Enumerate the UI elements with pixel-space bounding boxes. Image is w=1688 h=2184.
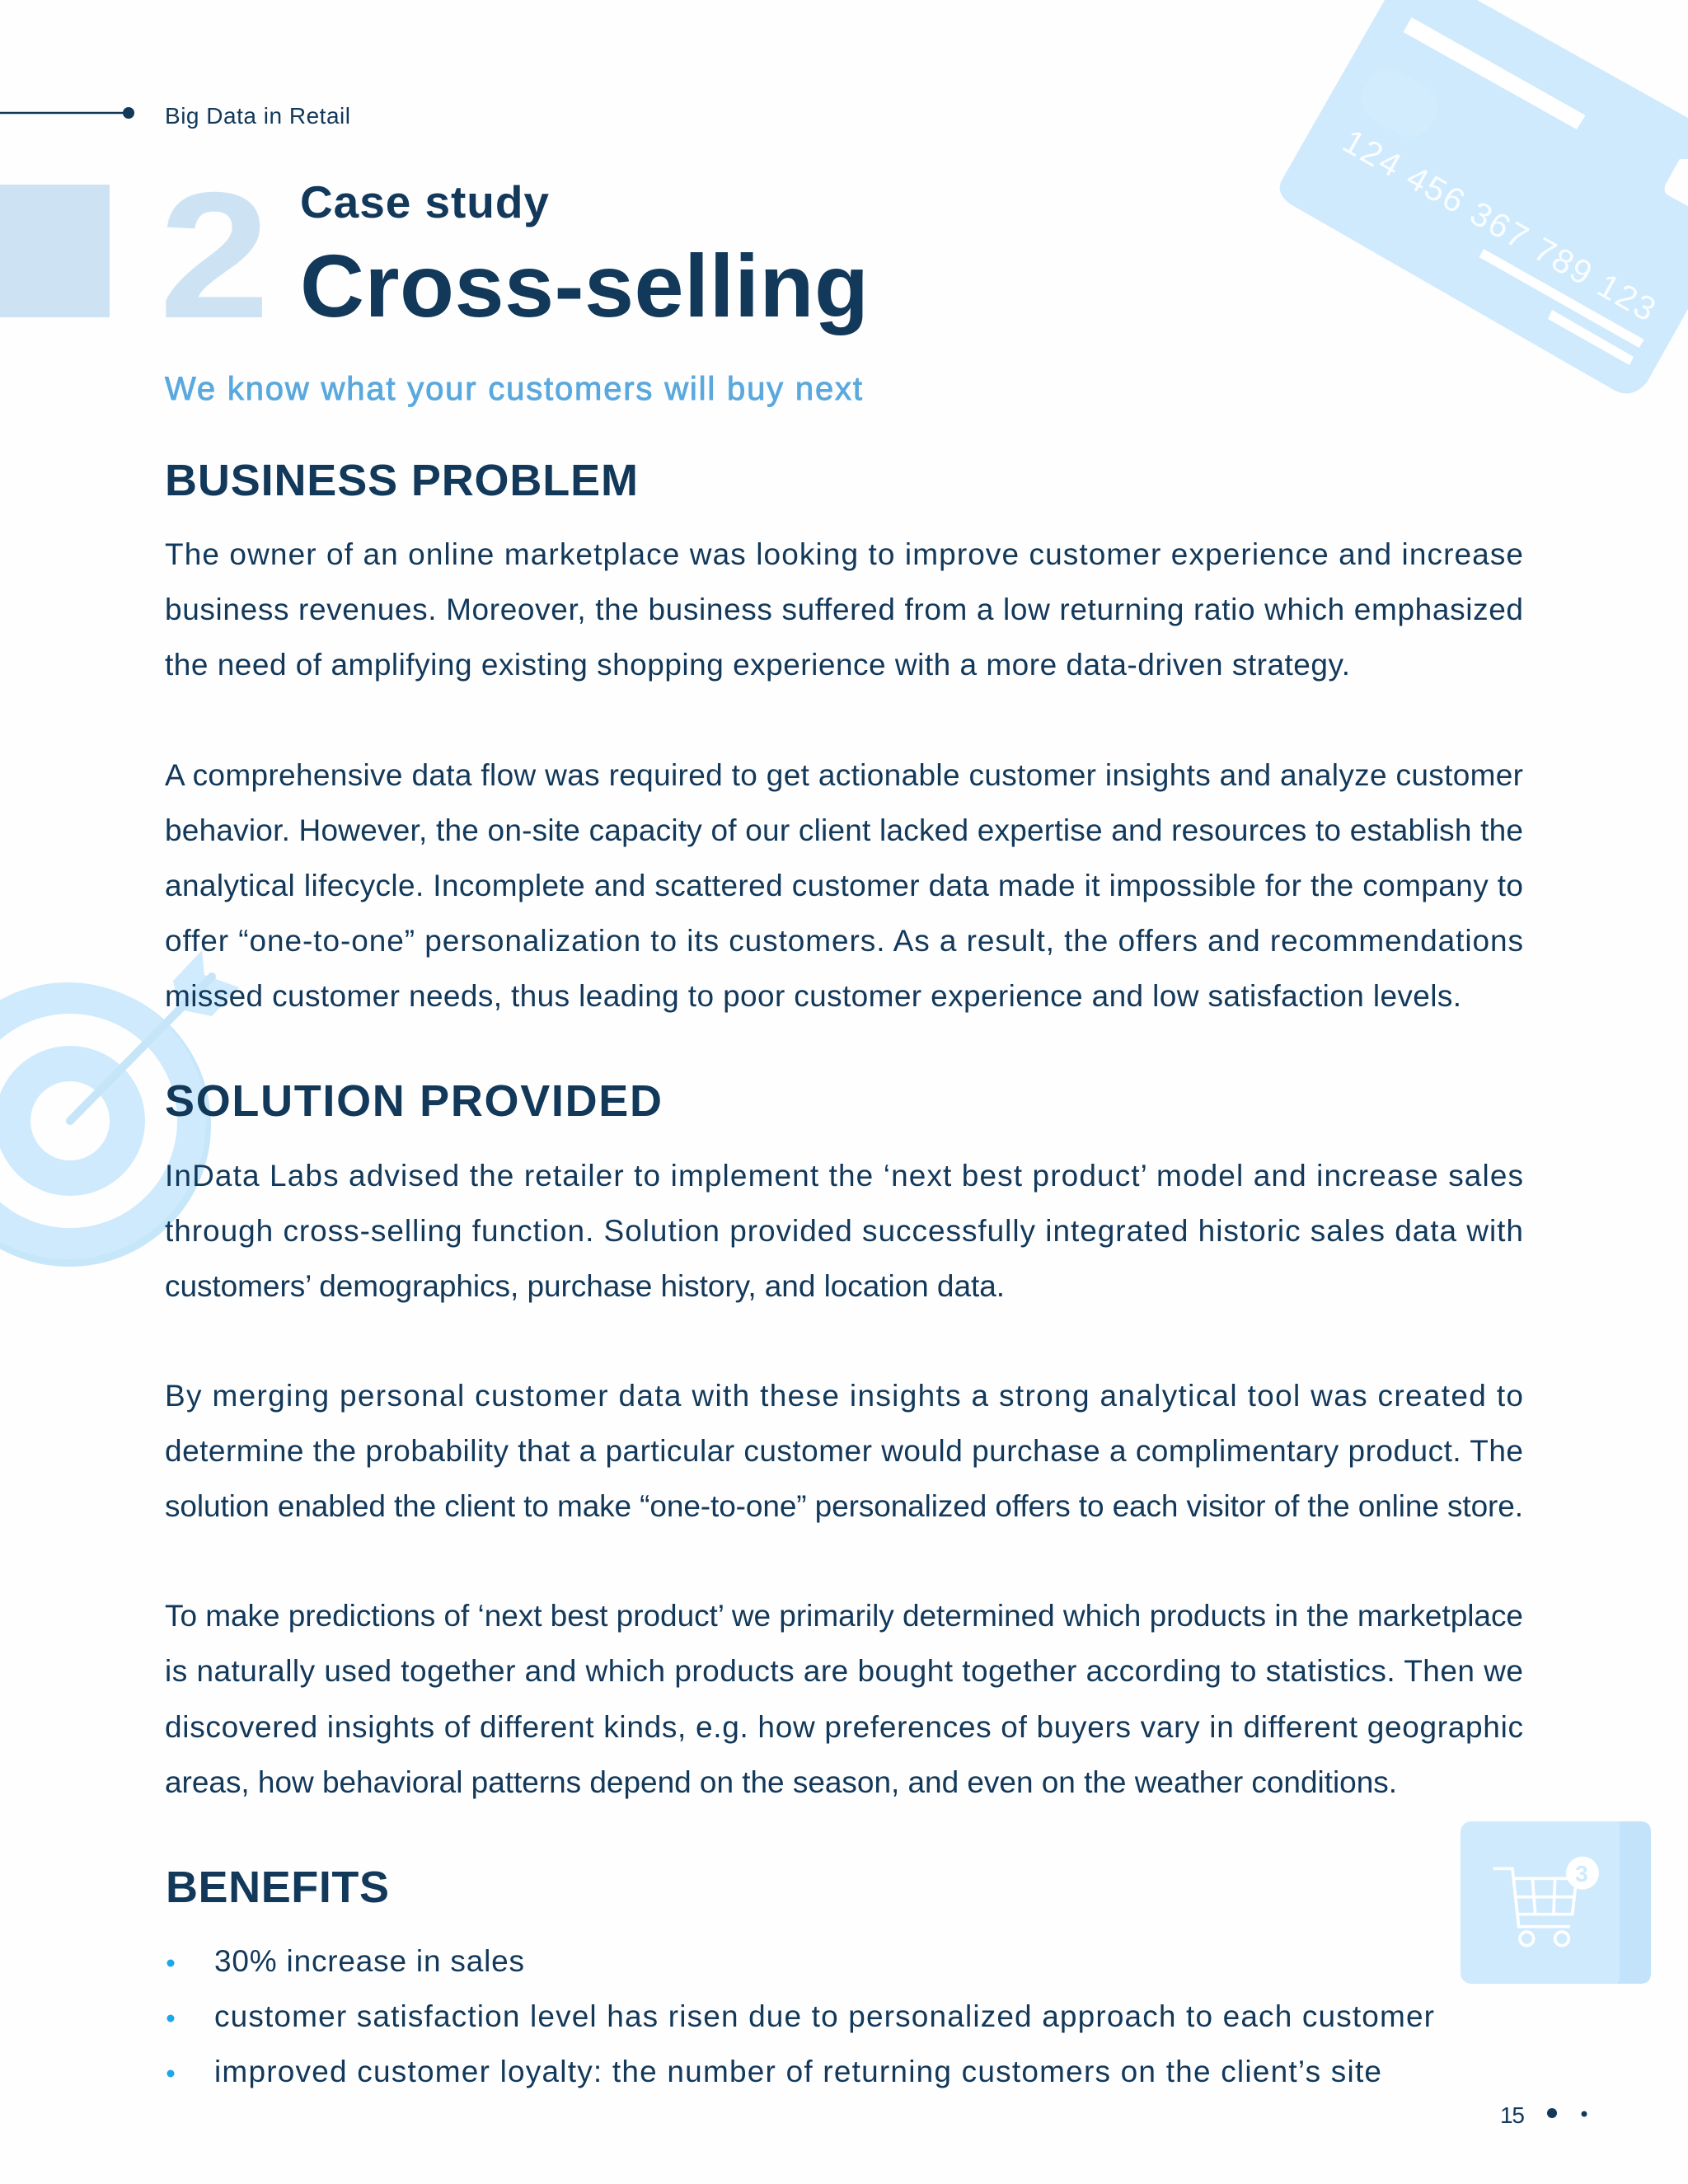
text block: business problem: analytical lifecycle. Incomplete and scattered customer data made it impossible for the company to (165, 869, 1523, 902)
page dots (1547, 2108, 1587, 2118)
text block: solution provided: areas, how behavioral patterns depend on the season, and even on the weather conditions. (165, 1765, 1397, 1799)
text block: solution provided: InData Labs advised the retailer to implement the ‘next best product’ model and increase sales (165, 1159, 1523, 1193)
icon: shopping cart card (1461, 1821, 1651, 1984)
text block: solution provided: is naturally used together and which products are bought together according to statistics. Then we (165, 1654, 1523, 1688)
text block: solution provided: solution enabled the client to make “one-to-one” personalized offers to each visitor of the online store. (165, 1489, 1523, 1523)
large number 2: 2 (159, 155, 270, 355)
list: benefits: customer satisfaction level has risen due to personalized approach to each customer (214, 1999, 1434, 2033)
text block: business problem: missed customer needs, thus leading to poor customer experience and low satisfaction levels. (165, 979, 1461, 1013)
heading: business problem: BUSINESS PROBLEM (165, 456, 638, 505)
kicker: case study: Case study (300, 176, 549, 227)
page number: 15 (1500, 2102, 1525, 2128)
text block: business problem (165, 537, 1523, 1013)
text block: solution provided: To make predictions of ‘next best product’ we primarily determined which products in the marketplace (165, 1599, 1523, 1633)
text block: business problem: The owner of an online marketplace was looking to improve customer experience and increase (165, 537, 1523, 571)
heading: benefits: BENEFITS (166, 1863, 389, 1912)
text block: business problem: A comprehensive data flow was required to get actionable customer insights and analyze customer (165, 758, 1523, 792)
title: Cross-selling (300, 236, 869, 335)
text block: solution provided (165, 1159, 1523, 1799)
text block: business problem: behavior. However, the on-site capacity of our client lacked expertise and resources to establish the (165, 813, 1523, 847)
icon: credit card: 124 456 367 789 123 (1337, 122, 1662, 329)
text block: solution provided: discovered insights of different kinds, e.g. how preferences of buyers vary in different geographic (165, 1710, 1523, 1744)
decorative square (0, 185, 110, 317)
list: benefits: improved customer loyalty: the number of returning customers on the client’s site (214, 2055, 1381, 2088)
text block: solution provided: determine the probability that a particular customer would purchase a complimentary product. The (165, 1434, 1523, 1468)
list: benefits: 30% increase in sales (214, 1944, 524, 1978)
header rule with dot (0, 107, 134, 119)
text block: solution provided: customers’ demographics, purchase history, and location data. (165, 1269, 1005, 1303)
section label: Big Data in Retail (165, 103, 350, 129)
icon: shopping cart card: 3 (1575, 1861, 1588, 1886)
icon: credit card (1280, 0, 1688, 393)
text block: business problem: business revenues. Moreover, the business suffered from a low returning ratio which emphasized (165, 593, 1523, 626)
text block: solution provided: through cross-selling function. Solution provided successfully integrated historic sales data with (165, 1214, 1523, 1248)
icon: target with arrow (0, 950, 239, 1267)
text block: business problem: offer “one-to-one” personalization to its customers. As a result, the offers and recommendations (165, 924, 1523, 958)
text block: solution provided: By merging personal customer data with these insights a strong analytical tool was created to (165, 1379, 1523, 1413)
list: benefits (166, 1944, 1434, 2088)
subtitle: We know what your customers will buy next (165, 371, 862, 407)
text block: business problem: the need of amplifying existing shopping experience with a more data-driven strategy. (165, 648, 1350, 682)
heading: solution provided: SOLUTION PROVIDED (165, 1076, 662, 1126)
